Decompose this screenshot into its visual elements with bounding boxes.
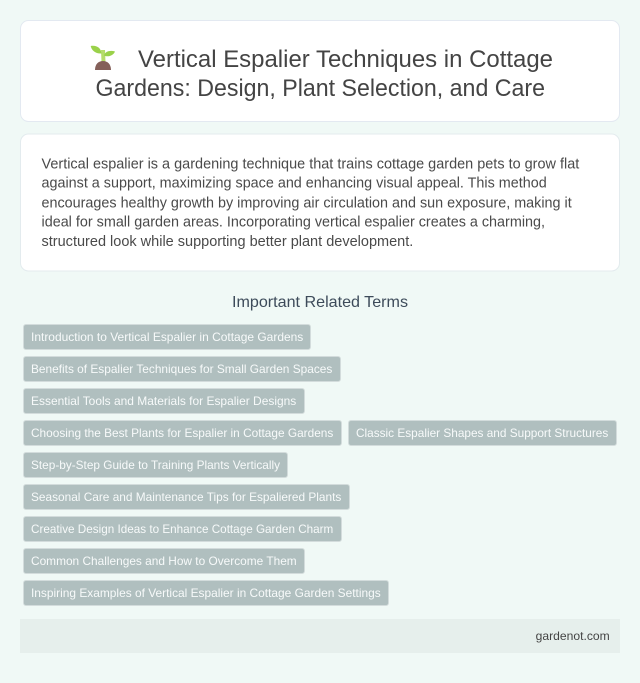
panel: title card: [20, 20, 620, 122]
title line 1: Vertical Espalier Techniques in Cottage: [138, 46, 553, 73]
chip 1: Introduction to Vertical Espalier in Cottage Gardens: [31, 330, 303, 344]
chip 5: [348, 420, 616, 446]
chip 8: Creative Design Ideas to Enhance Cottage Garden Charm: [31, 522, 333, 536]
footer source text: gardenot.com: [536, 629, 610, 643]
chip 10: [24, 580, 388, 606]
chip 7: [24, 484, 350, 510]
chip 5: Classic Espalier Shapes and Support Structures: [356, 426, 608, 440]
heading: related terms: Important Related Terms: [232, 294, 408, 311]
chip 8: [24, 516, 342, 542]
chip 4: [24, 420, 342, 446]
title line 2: Gardens: Design, Plant Selection, and Care: [96, 75, 545, 102]
icon: seedling: [91, 46, 115, 70]
chip 4: Choosing the Best Plants for Espalier in Cottage Gardens: [31, 426, 333, 440]
description text: encourages healthy growth by improving air circulation and sun exposure, making it: [42, 195, 572, 211]
chip 2: Benefits of Espalier Techniques for Small Garden Spaces: [31, 362, 332, 376]
description text: Vertical espalier is a gardening technique that trains cottage garden pets to grow flat: [42, 156, 579, 172]
chip 1: [24, 324, 310, 350]
chip 3: [24, 388, 304, 414]
description text: [42, 156, 579, 250]
chip 3: Essential Tools and Materials for Espalier Designs: [31, 394, 296, 408]
chip 10: Inspiring Examples of Vertical Espalier in Cottage Garden Settings: [31, 586, 381, 600]
description text: against a support, maximizing space and enhancing visual appeal. This method: [42, 176, 547, 192]
chip 6: [24, 452, 288, 478]
term chips: [24, 324, 616, 606]
chip 6: Step-by-Step Guide to Training Plants Vertically: [31, 458, 280, 472]
chip 9: [24, 548, 304, 574]
chip 9: Common Challenges and How to Overcome Them: [31, 554, 297, 568]
chip 7: Seasonal Care and Maintenance Tips for Espaliered Plants: [31, 490, 341, 504]
chip 2: [24, 356, 340, 382]
description text: structured look while supporting better plant development.: [42, 234, 413, 250]
panel: description: [20, 134, 620, 271]
footer: [20, 619, 620, 653]
description text: ideal for small garden areas. Incorporating vertical espalier creates a charming,: [42, 215, 545, 231]
